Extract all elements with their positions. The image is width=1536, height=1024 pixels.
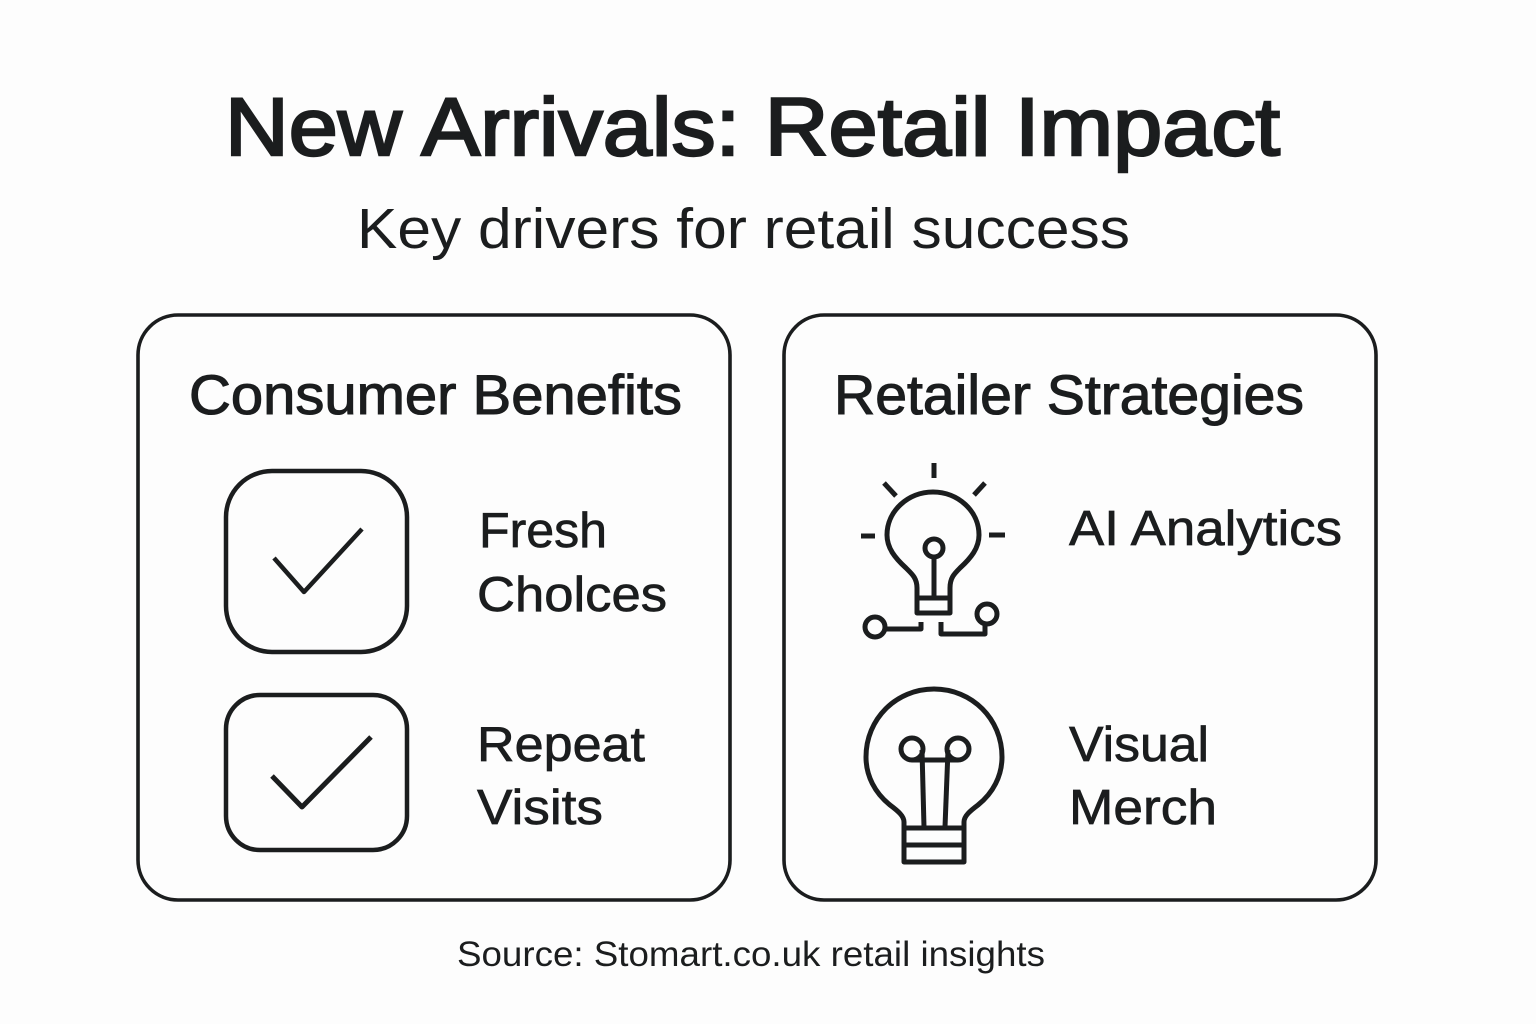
label: visual merch [1069,718,1217,835]
label: fresh choices [477,504,667,622]
icon: checkbox fresh choices [226,471,407,652]
icon: light bulb with circuit [861,463,1005,637]
source note: Source: Stomart.co.uk retail insights [457,935,1045,974]
label: repeat visits: Repeat [477,718,645,772]
panel: consumer benefits [138,315,730,900]
title: New Arrivals: Retail Impact [225,82,1280,173]
panel outline [138,315,730,900]
label: repeat visits: Visits [477,781,603,835]
panel outline [784,315,1376,900]
label: visual merch: Visual [1069,718,1209,772]
panel: retailer strategies [784,315,1376,900]
heading: retailer strategies: Retailer Strategies [834,363,1304,426]
heading: consumer benefits: Consumer Benefits [189,363,682,426]
icon: light bulb with filament [866,689,1002,862]
icon: checkbox repeat visits [226,695,407,850]
label: repeat visits [477,718,645,835]
label: fresh choices: Fresh [479,504,607,558]
label: ai analytics: AI Analytics [1069,502,1342,556]
label: fresh choices: Cholces [477,568,667,622]
subtitle: Key drivers for retail success [357,197,1130,261]
label: visual merch: Merch [1069,781,1217,835]
